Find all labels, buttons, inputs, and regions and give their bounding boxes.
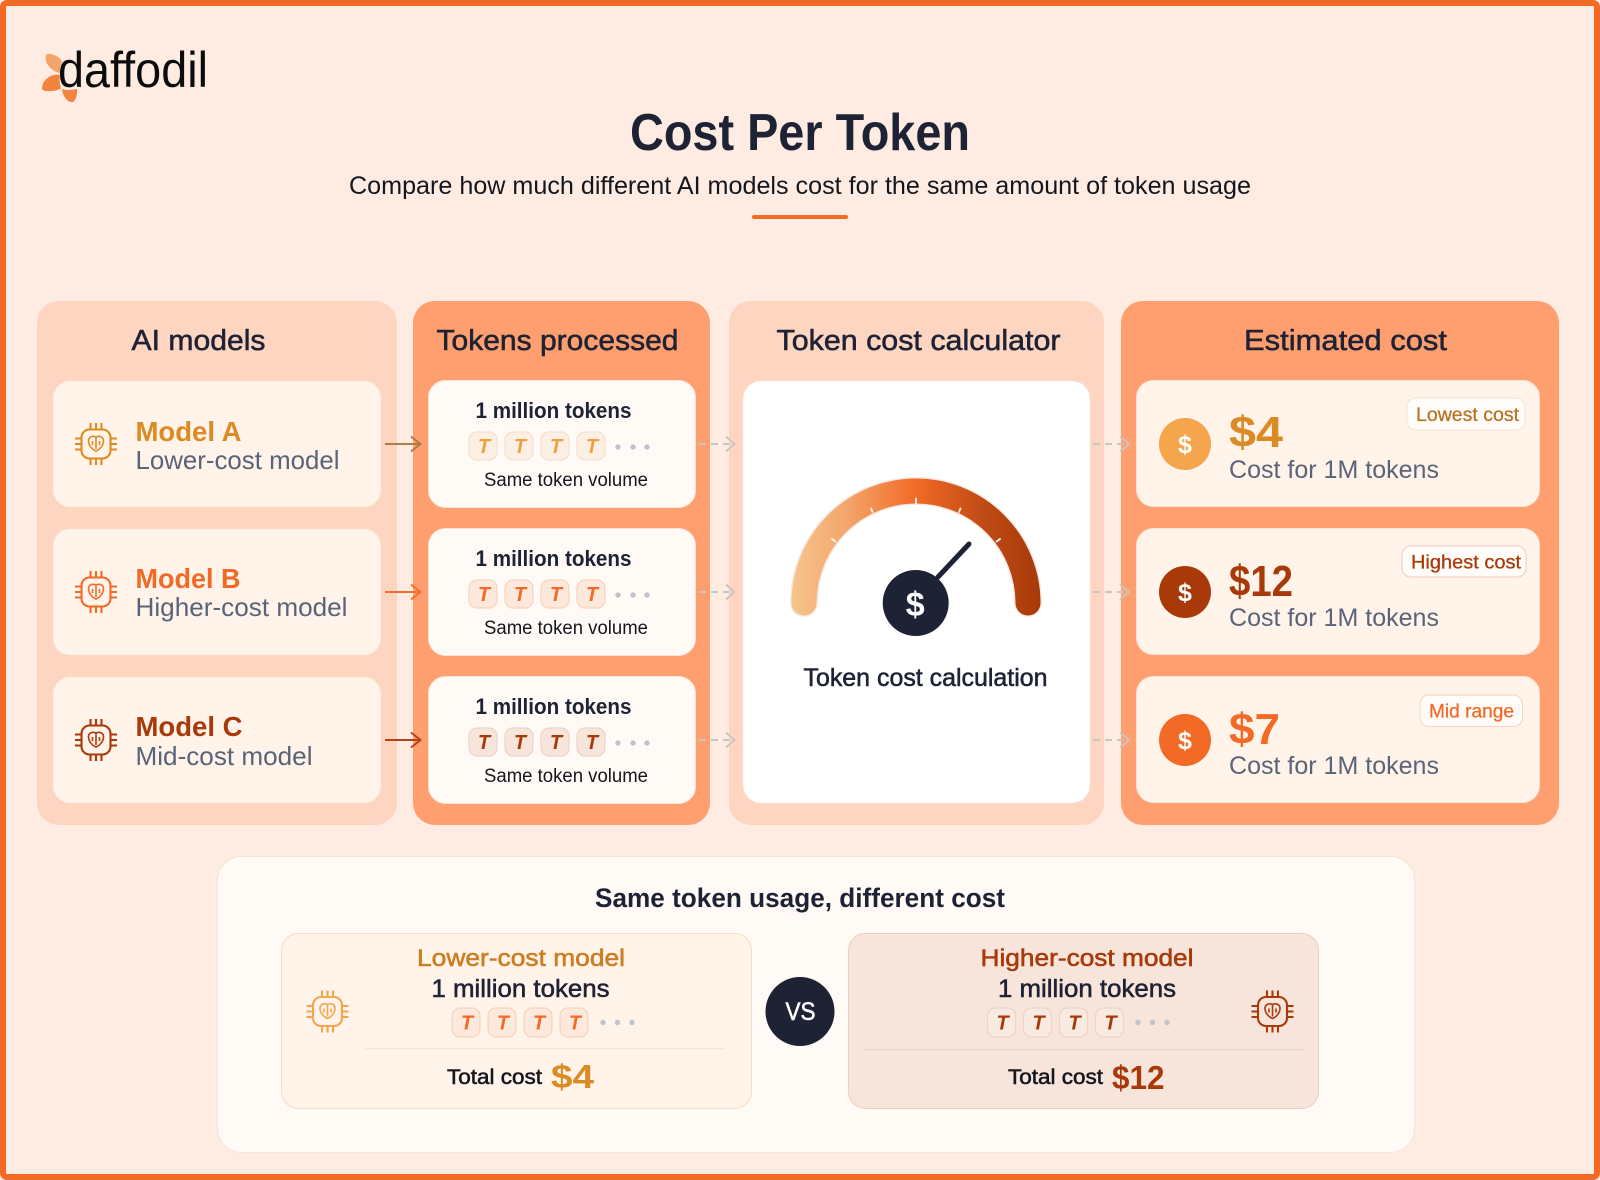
card: Model A: Model A — [136, 416, 242, 447]
arrow: Model C to tokens — [385, 732, 420, 748]
cost card: $4: $4 — [1229, 408, 1284, 457]
title underline — [752, 215, 848, 219]
card: Model B: Model B — [136, 563, 240, 594]
comparison card: higher cost — [848, 934, 1318, 1108]
token card C — [428, 676, 696, 804]
token card C: T — [514, 732, 528, 754]
comparison card: higher cost: T — [1104, 1012, 1118, 1034]
VS badge — [766, 977, 834, 1046]
comparison card: higher cost: T — [1068, 1012, 1082, 1034]
gauge: $ — [906, 586, 925, 624]
dashed arrows: tokens to calculator — [699, 436, 734, 748]
VS badge: VS — [786, 998, 816, 1026]
cost card: $7: $7 — [1229, 705, 1280, 754]
panel: Token cost calculator — [729, 301, 1104, 825]
comparison card: lower cost: T — [497, 1012, 511, 1034]
card: Model B — [53, 529, 381, 655]
token card C: 1 million tokens — [476, 694, 632, 719]
token card B: T — [586, 584, 600, 606]
comparison card: lower cost: Lower-cost model — [417, 945, 625, 972]
cost card: $4 — [1136, 380, 1540, 506]
heading: Estimated cost: Estimated cost — [1244, 325, 1447, 357]
cost card: $12: $12 — [1229, 557, 1293, 606]
card: Model C: Mid-cost model — [136, 741, 312, 771]
arrow: Model B to tokens — [385, 584, 420, 600]
card: Model C: Model C — [136, 711, 242, 742]
comparison card: lower cost: T — [533, 1012, 547, 1034]
arrow: Model A to tokens — [385, 436, 420, 452]
cost card: $7: $ — [1178, 727, 1192, 755]
cost card: $12: Highest cost — [1411, 552, 1522, 574]
token card C: T — [586, 732, 600, 754]
heading: Tokens processed: Tokens processed — [436, 325, 678, 357]
subtitle: Compare how much different AI models cost for the same amount of token usage — [349, 172, 1251, 200]
card: Model B: Higher-cost model — [136, 592, 348, 622]
token card A — [428, 380, 696, 508]
gauge caption: Token cost calculation — [804, 664, 1048, 692]
panel: Estimated cost — [1121, 301, 1559, 825]
comparison card: higher cost: Total cost — [1008, 1066, 1103, 1089]
heading: Same token usage, different cost: Same token usage, different cost — [595, 883, 1005, 913]
dashed arrows: calculator to cost — [1093, 436, 1129, 748]
card: Model A: Lower-cost model — [136, 445, 340, 475]
comparison card: higher cost: $12 — [1112, 1059, 1164, 1096]
comparison card: lower cost: 1 million tokens — [432, 975, 610, 1003]
token card A: T — [514, 436, 528, 458]
cost card: $12 — [1136, 528, 1540, 654]
cost card: $12: $ — [1178, 579, 1192, 607]
cost card: $12: Cost for 1M tokens — [1229, 604, 1439, 632]
comparison card: lower cost — [282, 934, 752, 1108]
token card C: T — [478, 732, 492, 754]
token card C: Same token volume — [484, 766, 648, 787]
comparison card: higher cost: T — [1032, 1012, 1046, 1034]
comparison card: lower cost: Total cost — [447, 1066, 542, 1089]
cost card: $4: Lowest cost — [1416, 405, 1520, 426]
heading: AI models: AI models — [132, 325, 266, 357]
heading: Token cost calculator: Token cost calculator — [776, 325, 1061, 357]
cost card: $7: Cost for 1M tokens — [1229, 752, 1439, 780]
comparison card: higher cost: Higher-cost model — [980, 945, 1194, 972]
title: Cost Per Token — [630, 104, 970, 162]
cost card: $7: Mid range — [1429, 702, 1514, 722]
calculator card — [743, 381, 1090, 803]
card: Model A — [53, 381, 381, 507]
comparison card: higher cost: 1 million tokens — [998, 975, 1176, 1003]
logo: daffodil: daffodil — [58, 42, 208, 98]
card: Model C — [53, 677, 381, 803]
comparison card: lower cost: T — [569, 1012, 583, 1034]
token card A: 1 million tokens — [476, 398, 632, 423]
comparison card: lower cost: $4 — [551, 1058, 595, 1095]
cost card: $7 — [1136, 676, 1540, 802]
token card A: T — [478, 436, 492, 458]
cost card: $4: Cost for 1M tokens — [1229, 456, 1439, 484]
token card A: T — [550, 436, 564, 458]
token card B: 1 million tokens — [476, 546, 632, 571]
comparison card: higher cost: T — [996, 1012, 1010, 1034]
panel: comparison — [218, 856, 1414, 1152]
cost card: $4: $ — [1178, 431, 1192, 459]
panel: Tokens processed — [413, 301, 710, 825]
token card C: T — [550, 732, 564, 754]
token card A: T — [586, 436, 600, 458]
token card B — [428, 528, 696, 656]
panel: AI models — [37, 301, 397, 825]
token card B: T — [514, 584, 528, 606]
token card B: T — [478, 584, 492, 606]
comparison card: lower cost: T — [461, 1012, 475, 1034]
token card B: Same token volume — [484, 618, 648, 639]
token card B: T — [550, 584, 564, 606]
gauge — [804, 491, 1028, 636]
token card A: Same token volume — [484, 470, 648, 491]
